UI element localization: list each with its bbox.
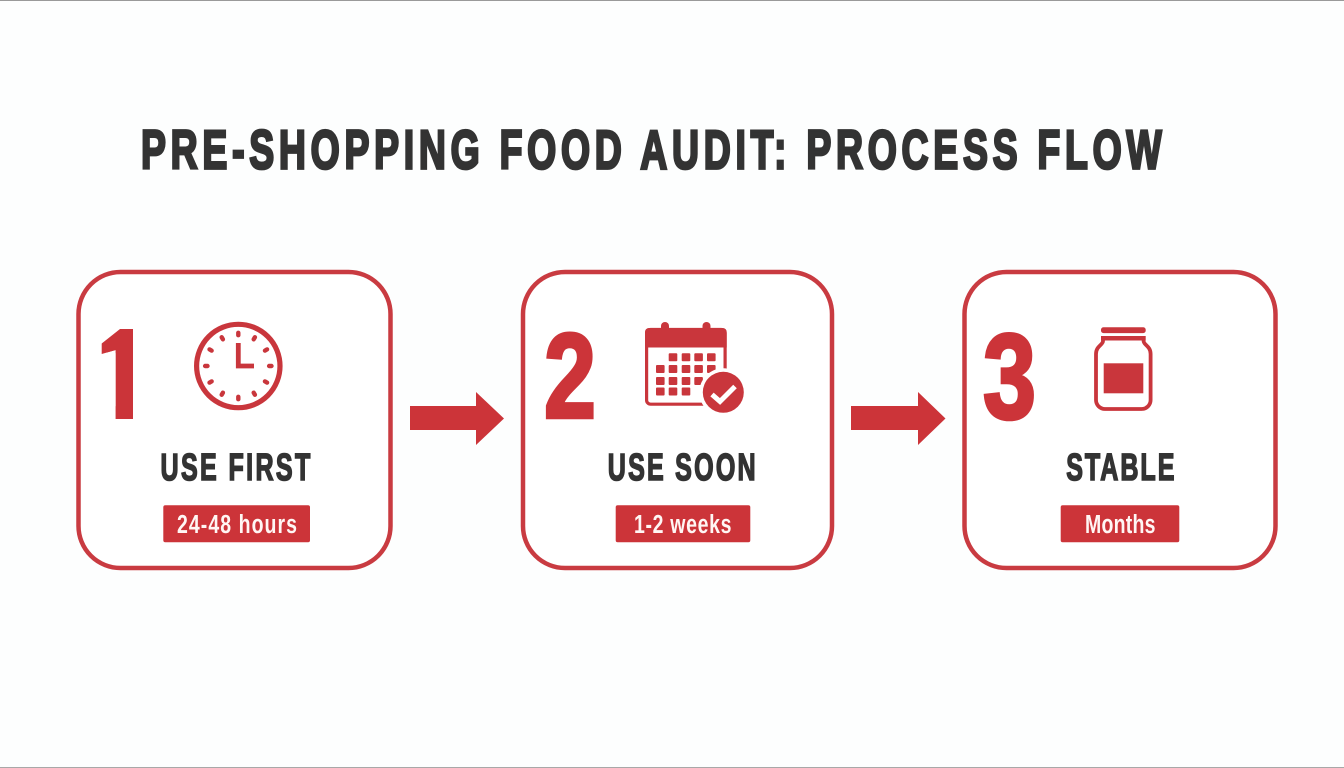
badge: months: [1061, 505, 1179, 542]
panel: step 1 use first: [78, 272, 390, 568]
step number 3: 3: [983, 308, 1036, 444]
icon: calendar with check: [645, 322, 747, 416]
icon: clock: [197, 324, 280, 408]
title: PRE-SHOPPING FOOD AUDIT: PROCESS FLOW: [141, 118, 1162, 180]
badge: 1-2 weeks: 1-2 weeks: [634, 509, 732, 539]
label: use first: USE FIRST: [160, 446, 311, 488]
label: stable: STABLE: [1066, 446, 1174, 488]
badge: months: Months: [1085, 509, 1156, 539]
label: use soon: USE SOON: [608, 446, 756, 488]
panel: step 3 stable: [964, 272, 1276, 568]
arrow: step 1 to step 2: [410, 392, 504, 445]
arrow: step 2 to step 3: [851, 392, 946, 445]
step number 1: 1: [101, 308, 151, 446]
icon: jar: [1096, 327, 1151, 409]
badge: 24-48 hours: 24-48 hours: [177, 509, 297, 539]
badge: 24-48 hours: [163, 505, 310, 542]
panel: step 2 use soon: [523, 272, 832, 568]
badge: 1-2 weeks: [616, 505, 750, 542]
step number 2: 2: [544, 308, 596, 444]
